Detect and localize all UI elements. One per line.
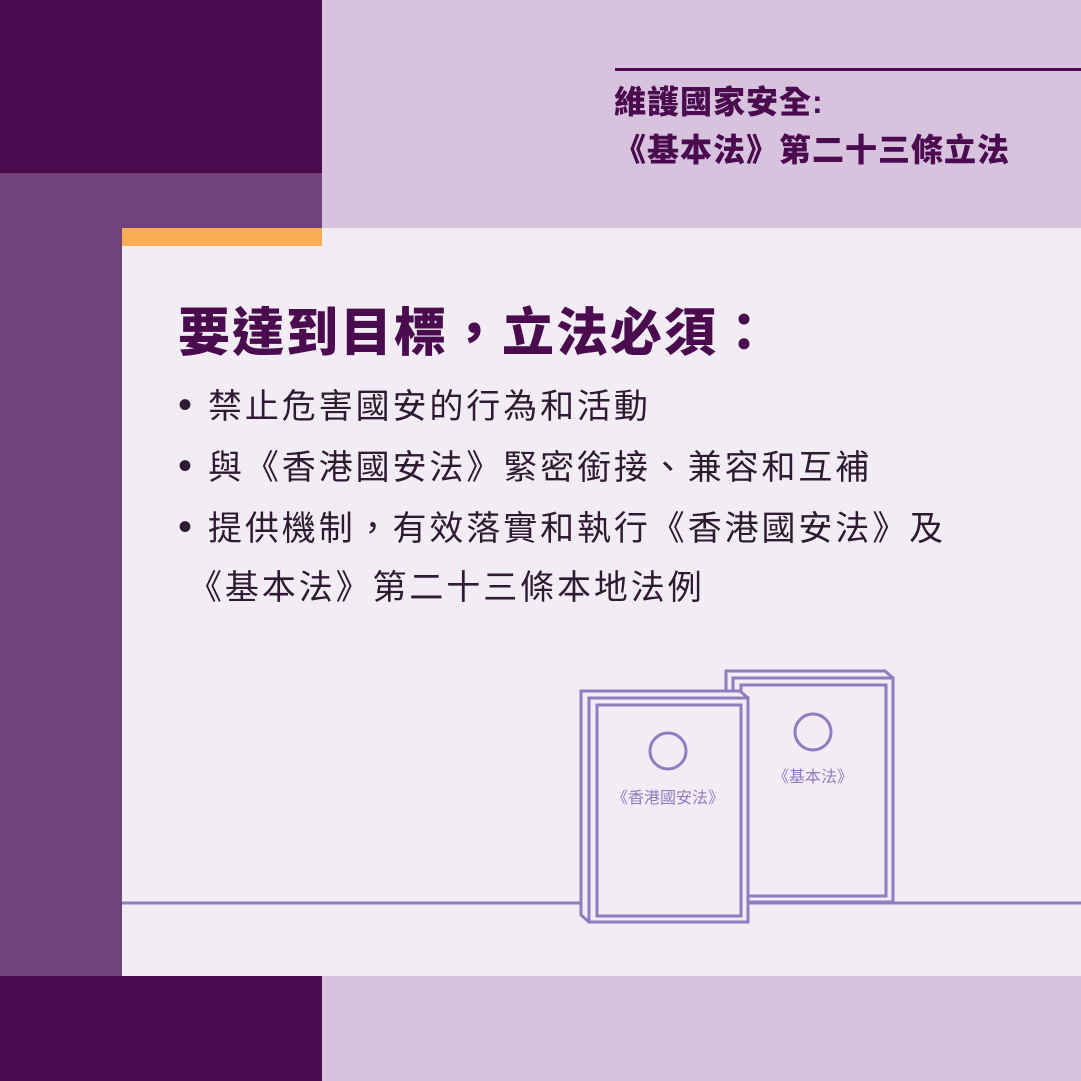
book: Basic Law — [726, 671, 893, 902]
bullet list: 禁止危害國安的行為和活動 — [208, 388, 651, 426]
header title: 《基本法》第二十三條立法 — [614, 132, 1010, 168]
bullet list — [178, 383, 946, 607]
header rule — [615, 68, 1081, 71]
book: NSL: 《香港國安法》 — [612, 789, 724, 807]
block: left mid purple — [0, 173, 322, 976]
bullet list: • — [178, 383, 192, 427]
heading: 要達到目標，立法必須： — [178, 305, 772, 363]
shelf line — [122, 902, 1081, 904]
header title — [614, 84, 1010, 168]
panel: main — [122, 228, 1081, 976]
header title: 維護國家安全: — [614, 84, 824, 120]
block: top-left dark — [0, 0, 322, 173]
bullet list: 提供機制，有效落實和執行《香港國安法》及 — [208, 510, 946, 548]
book: NSL — [581, 691, 748, 922]
bullet list: • — [178, 505, 192, 549]
block: bottom-left dark — [0, 976, 322, 1081]
bullet list: 《基本法》第二十三條本地法例 — [188, 569, 705, 607]
bullet list: • — [178, 444, 192, 488]
accent bar — [122, 228, 322, 246]
bullet list: 與《香港國安法》緊密銜接、兼容和互補 — [208, 449, 872, 487]
book: Basic Law: 《基本法》 — [773, 768, 853, 786]
